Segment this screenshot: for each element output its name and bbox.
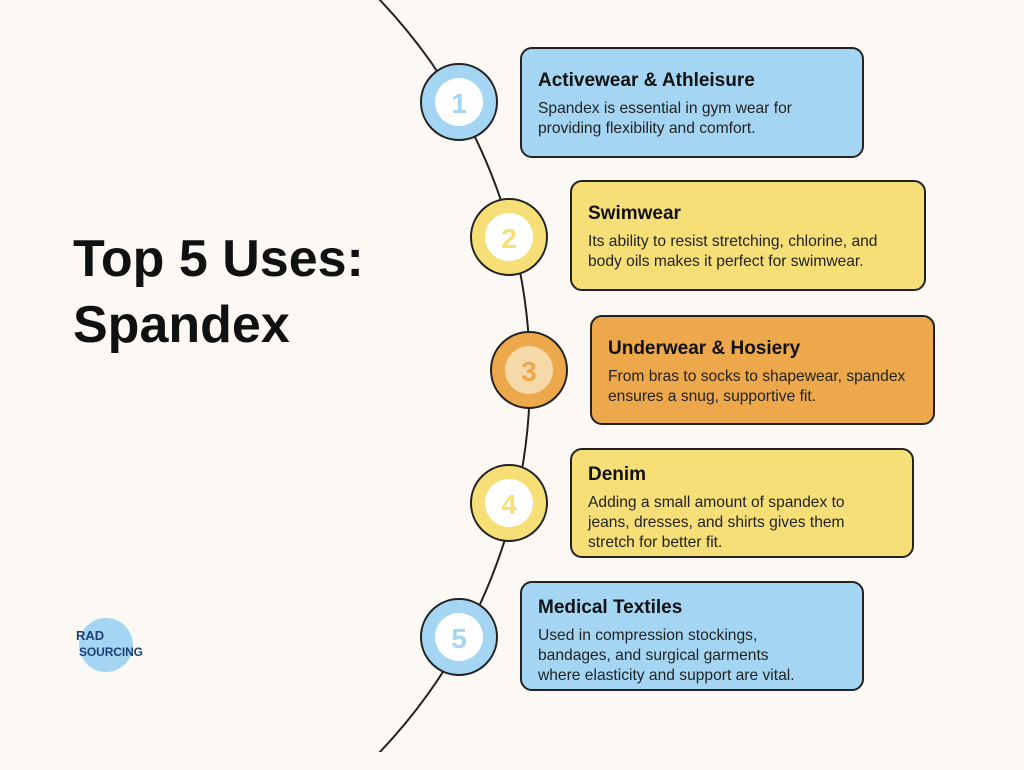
logo: [76, 618, 143, 672]
icon: number 5: [421, 599, 497, 675]
panel: Underwear: [590, 315, 935, 425]
panel: Activewear: Activewear & Athleisure: [538, 70, 755, 91]
panel: Denim: stretch for better fit.: [588, 534, 722, 551]
logo: SOURCING: [79, 645, 143, 659]
panel: Medical: bandages, and surgical garments: [538, 647, 769, 664]
panel: Medical: [520, 581, 864, 691]
icon: number 4: [471, 465, 547, 541]
panel: Medical: Used in compression stockings,: [538, 627, 757, 644]
panel: Medical: where elasticity and support are vital.: [538, 667, 795, 684]
icon: number 2: 2: [501, 223, 517, 254]
icon: number 3: [491, 332, 567, 408]
panel: Activewear: [520, 47, 864, 158]
panel: Denim: jeans, dresses, and shirts gives them: [588, 514, 845, 531]
panel: Swimwear: Its ability to resist stretching, chlorine, and: [588, 233, 877, 250]
panel: Underwear: Underwear & Hosiery: [608, 338, 800, 359]
title: [73, 230, 364, 354]
panel: Underwear: ensures a snug, supportive fit.: [608, 388, 816, 405]
icon: number 3: 3: [521, 356, 537, 387]
panel: Swimwear: body oils makes it perfect for swimwear.: [588, 253, 864, 270]
logo: RAD: [76, 628, 104, 643]
timeline arc and number circles: [76, 0, 568, 752]
title: Top 5 Uses:: [73, 230, 364, 288]
panel: Activewear: Spandex is essential in gym wear for: [538, 100, 792, 117]
panel: Denim: Denim: [588, 464, 646, 485]
panel: Denim: [570, 448, 914, 558]
panel: Activewear: providing flexibility and comfort.: [538, 120, 756, 137]
icon: number 2: [471, 199, 547, 275]
icon: number 1: 1: [451, 88, 467, 119]
icon: number 1: [421, 64, 497, 140]
title: Spandex: [73, 296, 290, 354]
panel: Denim: Adding a small amount of spandex to: [588, 494, 845, 511]
panel: Swimwear: [570, 180, 926, 291]
panel: Underwear: From bras to socks to shapewear, spandex: [608, 368, 905, 385]
icon: number 5: 5: [451, 623, 467, 654]
panel: Medical: Medical Textiles: [538, 597, 682, 618]
panel: Swimwear: Swimwear: [588, 203, 681, 224]
icon: number 4: 4: [501, 489, 517, 520]
